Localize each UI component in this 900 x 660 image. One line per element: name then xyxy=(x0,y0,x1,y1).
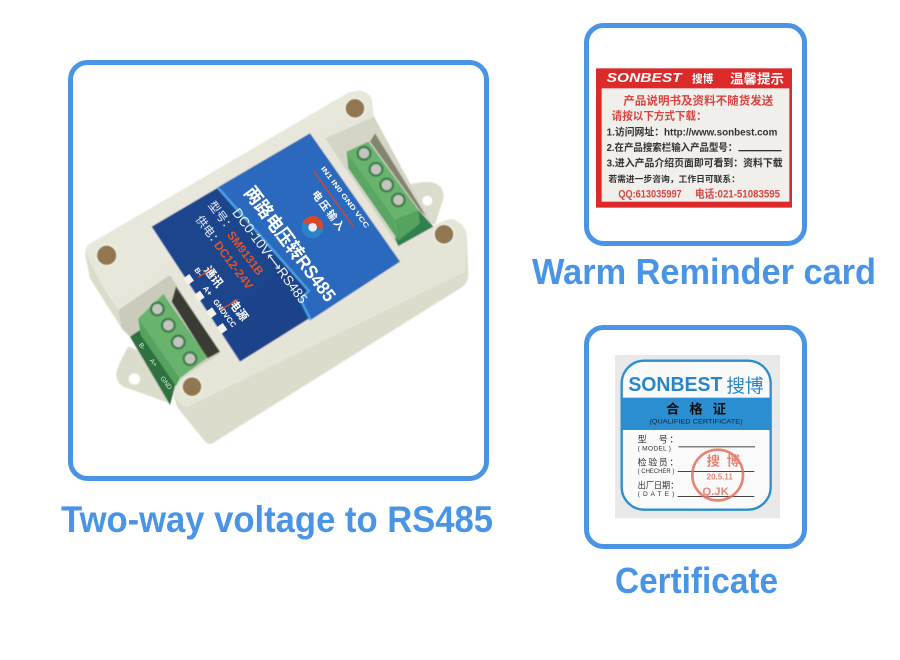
blue label xyxy=(152,133,400,362)
pcb pin labels: A+ xyxy=(148,358,158,369)
panel: module photo xyxy=(70,62,486,478)
brand: 搜博 xyxy=(726,375,764,396)
panel frame xyxy=(70,62,486,478)
card instructions xyxy=(607,94,783,200)
mounting ear right xyxy=(408,182,444,225)
ear holes xyxy=(129,196,432,385)
module label text xyxy=(137,166,370,392)
light blue label area xyxy=(218,133,400,320)
card instructions: 2.在产品搜索栏输入产品型号： xyxy=(607,141,737,154)
screw holes xyxy=(96,98,454,397)
label title: 两路电压转RS485 xyxy=(240,182,340,306)
recess shadows xyxy=(172,287,220,358)
card background xyxy=(596,68,792,208)
enclosure top face xyxy=(85,91,467,407)
card header: 温馨提示 xyxy=(730,70,784,86)
model label: 型号： xyxy=(205,198,238,235)
form fields: 出厂日期： xyxy=(638,479,678,490)
heading: certificate: Certificate xyxy=(615,560,778,601)
bottom pin labels: B- xyxy=(192,266,205,278)
mounting ear left xyxy=(116,347,173,403)
card instructions: QQ:613035997 xyxy=(618,188,682,200)
card instructions: 3.进入产品介绍页面即可看到：资料下载 xyxy=(607,157,783,170)
red card xyxy=(596,68,792,208)
brand: SONBEST xyxy=(628,373,723,396)
card header xyxy=(607,70,784,86)
red stamp: 20.5.11 xyxy=(707,473,733,482)
card instructions: 若需进一步咨询，工作日可联系： xyxy=(608,173,740,184)
right terminal recess xyxy=(325,117,433,247)
heading: two-way voltage: Two-way voltage to RS485 xyxy=(61,499,493,540)
bottom pin labels: VCC xyxy=(221,311,238,329)
panel frame xyxy=(586,26,804,244)
form fields: 型 号： xyxy=(638,434,678,444)
card inner xyxy=(622,361,771,510)
red stamp: 搜博 xyxy=(707,453,740,469)
pcb strips xyxy=(130,330,177,405)
right terminal block xyxy=(347,142,420,241)
range text: DC0-10V⟷RS485 xyxy=(229,205,311,307)
form fields xyxy=(638,434,755,498)
form fields: 检验员： xyxy=(638,457,678,468)
card instructions: 1.访问网址：http://www.sonbest.com xyxy=(607,125,777,138)
logo xyxy=(301,216,323,238)
bottom pin labels: GND xyxy=(211,297,229,317)
blue band xyxy=(622,398,770,430)
red stamp xyxy=(692,450,743,500)
form fields: ( CHECHER ) xyxy=(638,468,674,475)
red rules xyxy=(198,172,353,310)
input pins: IN1 IN0 GND VCC xyxy=(319,166,370,230)
bottom pin labels xyxy=(192,266,238,329)
model number: SM9131B xyxy=(224,229,266,278)
comms label: 通讯 xyxy=(201,263,226,291)
red stamp: Q.JK xyxy=(702,486,730,498)
panel: certificate xyxy=(586,328,804,546)
bottom pin labels: A+ xyxy=(201,284,215,298)
card background xyxy=(615,355,780,518)
module device illustration xyxy=(85,91,468,444)
pcb pin labels: B- xyxy=(137,342,146,352)
enclosure side faces xyxy=(85,110,468,444)
form fields: ( MODEL ) xyxy=(638,445,671,452)
power label: 供电： xyxy=(193,213,225,249)
card instructions: 产品说明书及资料不随货发送 xyxy=(623,94,774,108)
card instructions: 请按以下方式下载： xyxy=(612,109,707,122)
card instructions: 电话:021-51083595 xyxy=(695,187,780,200)
panel frame xyxy=(586,328,804,546)
white pads xyxy=(183,274,227,334)
card header: 搜博 xyxy=(692,73,714,86)
pcb pin labels: GND xyxy=(158,375,173,392)
card header: SONBEST xyxy=(607,71,683,85)
heading: warm reminder card: Warm Reminder card xyxy=(532,251,876,292)
voltage input label: 电压输入 xyxy=(309,188,348,234)
left terminal block xyxy=(138,294,207,386)
certificate card xyxy=(615,355,780,518)
band title xyxy=(649,401,743,426)
power section label: 电源 xyxy=(226,297,251,324)
panel: warm reminder card xyxy=(586,26,804,244)
label divider xyxy=(218,187,311,320)
left terminal recess xyxy=(118,275,220,382)
band title: (QUALIFIED CERTIFICATE) xyxy=(649,419,743,426)
form fields: ( D A T E ) xyxy=(638,491,674,498)
band title: 合格证 xyxy=(666,401,726,417)
power value: DC12-24V xyxy=(211,239,256,292)
pcb pin labels xyxy=(137,342,173,392)
